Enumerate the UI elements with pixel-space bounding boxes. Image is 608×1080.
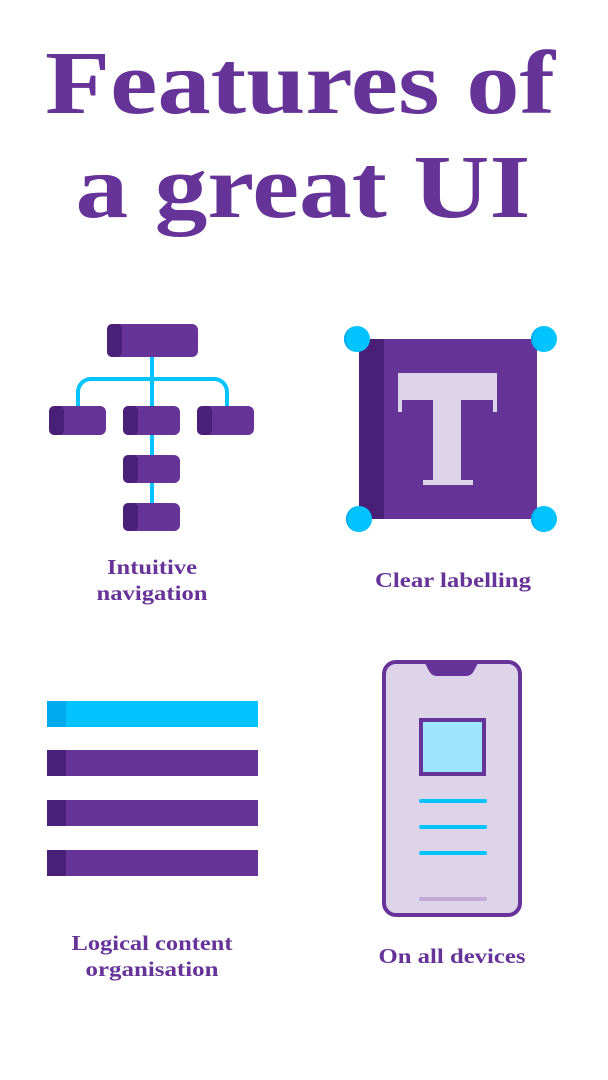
title: Features of	[45, 34, 556, 133]
label: logical content organisation: Logical content	[72, 931, 233, 955]
title	[45, 34, 556, 237]
icon: navigation tree	[49, 324, 254, 531]
label: logical content organisation	[72, 931, 233, 981]
icon: phone	[384, 662, 520, 915]
label: intuitive navigation: navigation	[96, 581, 208, 605]
label: intuitive navigation	[96, 555, 208, 605]
icon: content list bars	[47, 701, 258, 876]
label: logical content organisation: organisation	[86, 957, 219, 981]
label: intuitive navigation: Intuitive	[107, 555, 197, 579]
title: a great UI	[76, 138, 530, 237]
label: on all devices: On all devices	[378, 944, 526, 968]
label: clear labelling: Clear labelling	[375, 568, 532, 592]
icon: text T box	[344, 326, 557, 532]
